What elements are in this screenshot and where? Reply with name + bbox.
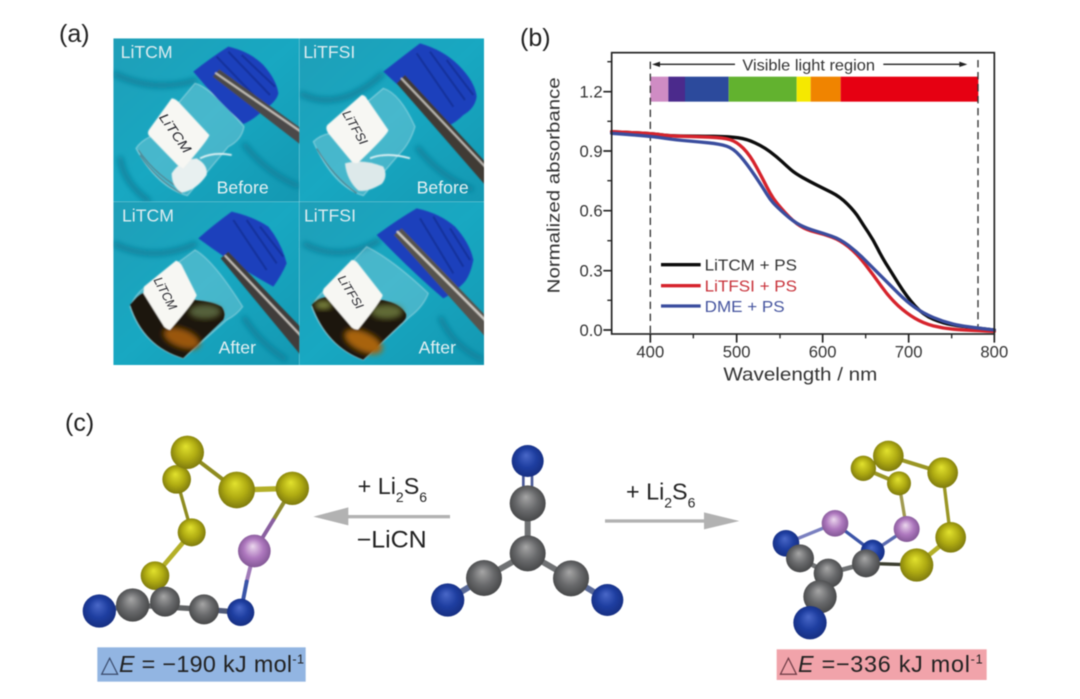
visible light region label with arrows: Visible light region (742, 57, 875, 74)
by-product label: -LiCN: −LiCN (357, 527, 427, 554)
photo: LiTFSI after: LiTFSI (304, 205, 356, 225)
x axis tick labels: 800 (980, 342, 1008, 361)
energy box: -336 kJ/mol: △E =−336 kJ mol (779, 651, 970, 677)
photo: LiTCM after: LiTCM (151, 275, 180, 313)
photo: LiTFSI after: After (419, 337, 456, 357)
legend (661, 258, 797, 316)
panel b: absorbance chart (543, 53, 1008, 385)
legend: LiTCM + PS (705, 258, 797, 275)
photo: LiTFSI after: LiTFSI (335, 273, 367, 312)
molecule: TCM anion (431, 445, 623, 617)
panel c: left product and reaction (83, 436, 450, 682)
reagent label: + Li2S6: S (672, 478, 688, 504)
x axis tick labels: 600 (809, 342, 837, 361)
legend: LiTFSI + PS (705, 279, 797, 296)
photo: LiTFSI before: Before (417, 178, 469, 198)
photo: LiTCM after: LiTCM (122, 205, 174, 225)
panel c: centre molecule and right product (431, 441, 987, 680)
visible light region label with arrows (652, 57, 967, 74)
y axis tick labels: 0.9 (580, 142, 603, 161)
y axis title: Normalized absorbance (543, 77, 563, 293)
panel label (a): (a) (59, 20, 90, 48)
photo: LiTFSI before: LiTFSI (303, 42, 355, 62)
y axis tick labels: 0.3 (580, 262, 603, 281)
plot frame and ticks (603, 53, 994, 343)
reagent label: + Li2S6: 6 (419, 489, 427, 505)
absorbance curves (612, 132, 994, 331)
energy box: -190 kJ/mol: △E = −190 kJ mol (101, 651, 292, 677)
photo: LiTCM before: Before (217, 178, 269, 198)
x axis title: Wavelength / nm (723, 364, 877, 385)
energy box: -336 kJ/mol: -1 (971, 652, 983, 666)
y axis tick labels: 0.6 (580, 202, 603, 221)
panel label (b): (b) (520, 24, 551, 52)
photo: LiTCM before (113, 38, 303, 202)
panel label (c): (c) (65, 409, 94, 437)
molecule: LiTCM with Li2S6 product (83, 436, 309, 628)
x axis tick labels: 700 (895, 342, 923, 361)
photo: LiTFSI before: LiTFSI (339, 108, 370, 148)
x axis tick labels: 500 (723, 342, 751, 361)
photo: LiTFSI after (299, 202, 488, 365)
panel a: vial photographs (113, 38, 488, 365)
arrow: to right product (605, 512, 739, 529)
photo: LiTCM before: LiTCM (156, 110, 195, 157)
reagent label: + Li2S6: + Li (626, 478, 664, 504)
x axis tick labels (636, 342, 1008, 361)
visible spectrum colour bar (650, 77, 978, 102)
arrow: to left product (313, 507, 450, 525)
reagent label: + Li2S6: 2 (396, 489, 404, 505)
energy box: -190 kJ/mol: -1 (292, 652, 304, 666)
y axis tick labels (580, 83, 603, 340)
reagent label: + Li2S6: S (404, 473, 419, 499)
photo: LiTCM after (113, 202, 303, 365)
y axis tick labels: 1.2 (580, 83, 603, 102)
photo: LiTCM after: After (219, 337, 256, 357)
reagent label: + Li2S6: 2 (664, 494, 672, 510)
legend: DME + PS (705, 299, 785, 316)
reagent label: + Li2S6: + Li (358, 473, 396, 499)
photo: LiTCM before: LiTCM (121, 42, 173, 62)
y axis tick labels: 0.0 (580, 321, 603, 340)
energy box: -190 kJ/mol (97, 647, 306, 682)
molecule: LiTCM with Li2S6 complex (773, 441, 966, 639)
x axis tick labels: 400 (636, 342, 664, 361)
reagent label: + Li2S6: 6 (688, 494, 696, 510)
photo: LiTFSI before (299, 38, 488, 202)
